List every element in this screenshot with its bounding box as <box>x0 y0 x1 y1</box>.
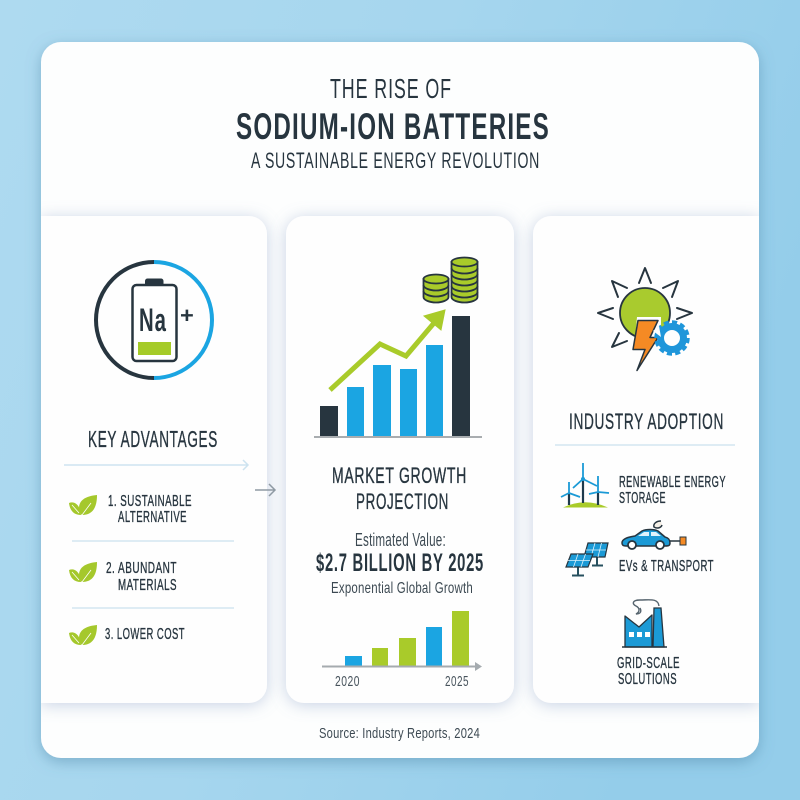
title block <box>236 73 550 173</box>
panel: key advantages <box>41 216 267 703</box>
item: abundant materials <box>69 560 177 594</box>
item: renewable energy storage: STORAGE <box>619 490 666 507</box>
item: sustainable alternative <box>69 493 192 526</box>
estimated value text: $2.7 BILLION BY 2025 <box>316 549 484 577</box>
heading: key advantages: KEY ADVANTAGES <box>88 426 218 452</box>
icon: sodium battery <box>96 262 212 378</box>
icon: factory <box>622 600 667 647</box>
mini bar chart 2020 to 2025: 2025 <box>445 673 469 690</box>
item: grid-scale solutions: GRID-SCALE <box>617 655 680 672</box>
item: EVs and transport <box>566 521 714 576</box>
arrow: divider <box>64 460 248 470</box>
estimated value text <box>316 530 484 597</box>
item: grid-scale solutions <box>617 600 680 688</box>
item: abundant materials: 2. ABUNDANT <box>106 560 177 577</box>
arrow: between panels <box>255 484 275 496</box>
icon: solar panels <box>566 543 608 576</box>
bar chart: growth with arrow and coins <box>314 258 482 437</box>
panel: industry adoption <box>533 216 759 703</box>
estimated value text: Estimated Value: <box>355 530 446 550</box>
icon: sodium battery: + <box>180 303 195 328</box>
mini bar chart 2020 to 2025: 2020 <box>335 673 360 690</box>
heading: market growth projection: MARKET GROWTH <box>332 463 467 488</box>
heading: market growth projection: PROJECTION <box>356 489 449 514</box>
source line: Source: Industry Reports, 2024 <box>319 725 480 742</box>
item: abundant materials: MATERIALS <box>118 577 177 594</box>
item: lower cost <box>69 625 185 645</box>
panel: market growth <box>286 216 514 703</box>
item: sustainable alternative: ALTERNATIVE <box>118 509 187 526</box>
item: lower cost: 3. LOWER COST <box>105 626 185 643</box>
item: grid-scale solutions: SOLUTIONS <box>618 671 677 688</box>
title block: SODIUM-ION BATTERIES <box>236 106 550 147</box>
icon: electric car <box>622 521 686 549</box>
icon: sun bolt gear <box>598 268 692 375</box>
item: EVs and transport: EVs & TRANSPORT <box>619 558 714 575</box>
title block: THE RISE OF <box>330 73 452 104</box>
heading: market growth projection <box>332 463 467 514</box>
item: renewable energy storage <box>561 463 726 508</box>
estimated value text: Exponential Global Growth <box>331 580 473 597</box>
item: sustainable alternative: 1. SUSTAINABLE <box>108 493 192 510</box>
title block: A SUSTAINABLE ENERGY REVOLUTION <box>251 148 540 173</box>
item: renewable energy storage: RENEWABLE ENERGY <box>619 474 726 491</box>
mini bar chart 2020 to 2025 <box>322 611 482 690</box>
icon: sodium battery: Na <box>139 302 167 338</box>
